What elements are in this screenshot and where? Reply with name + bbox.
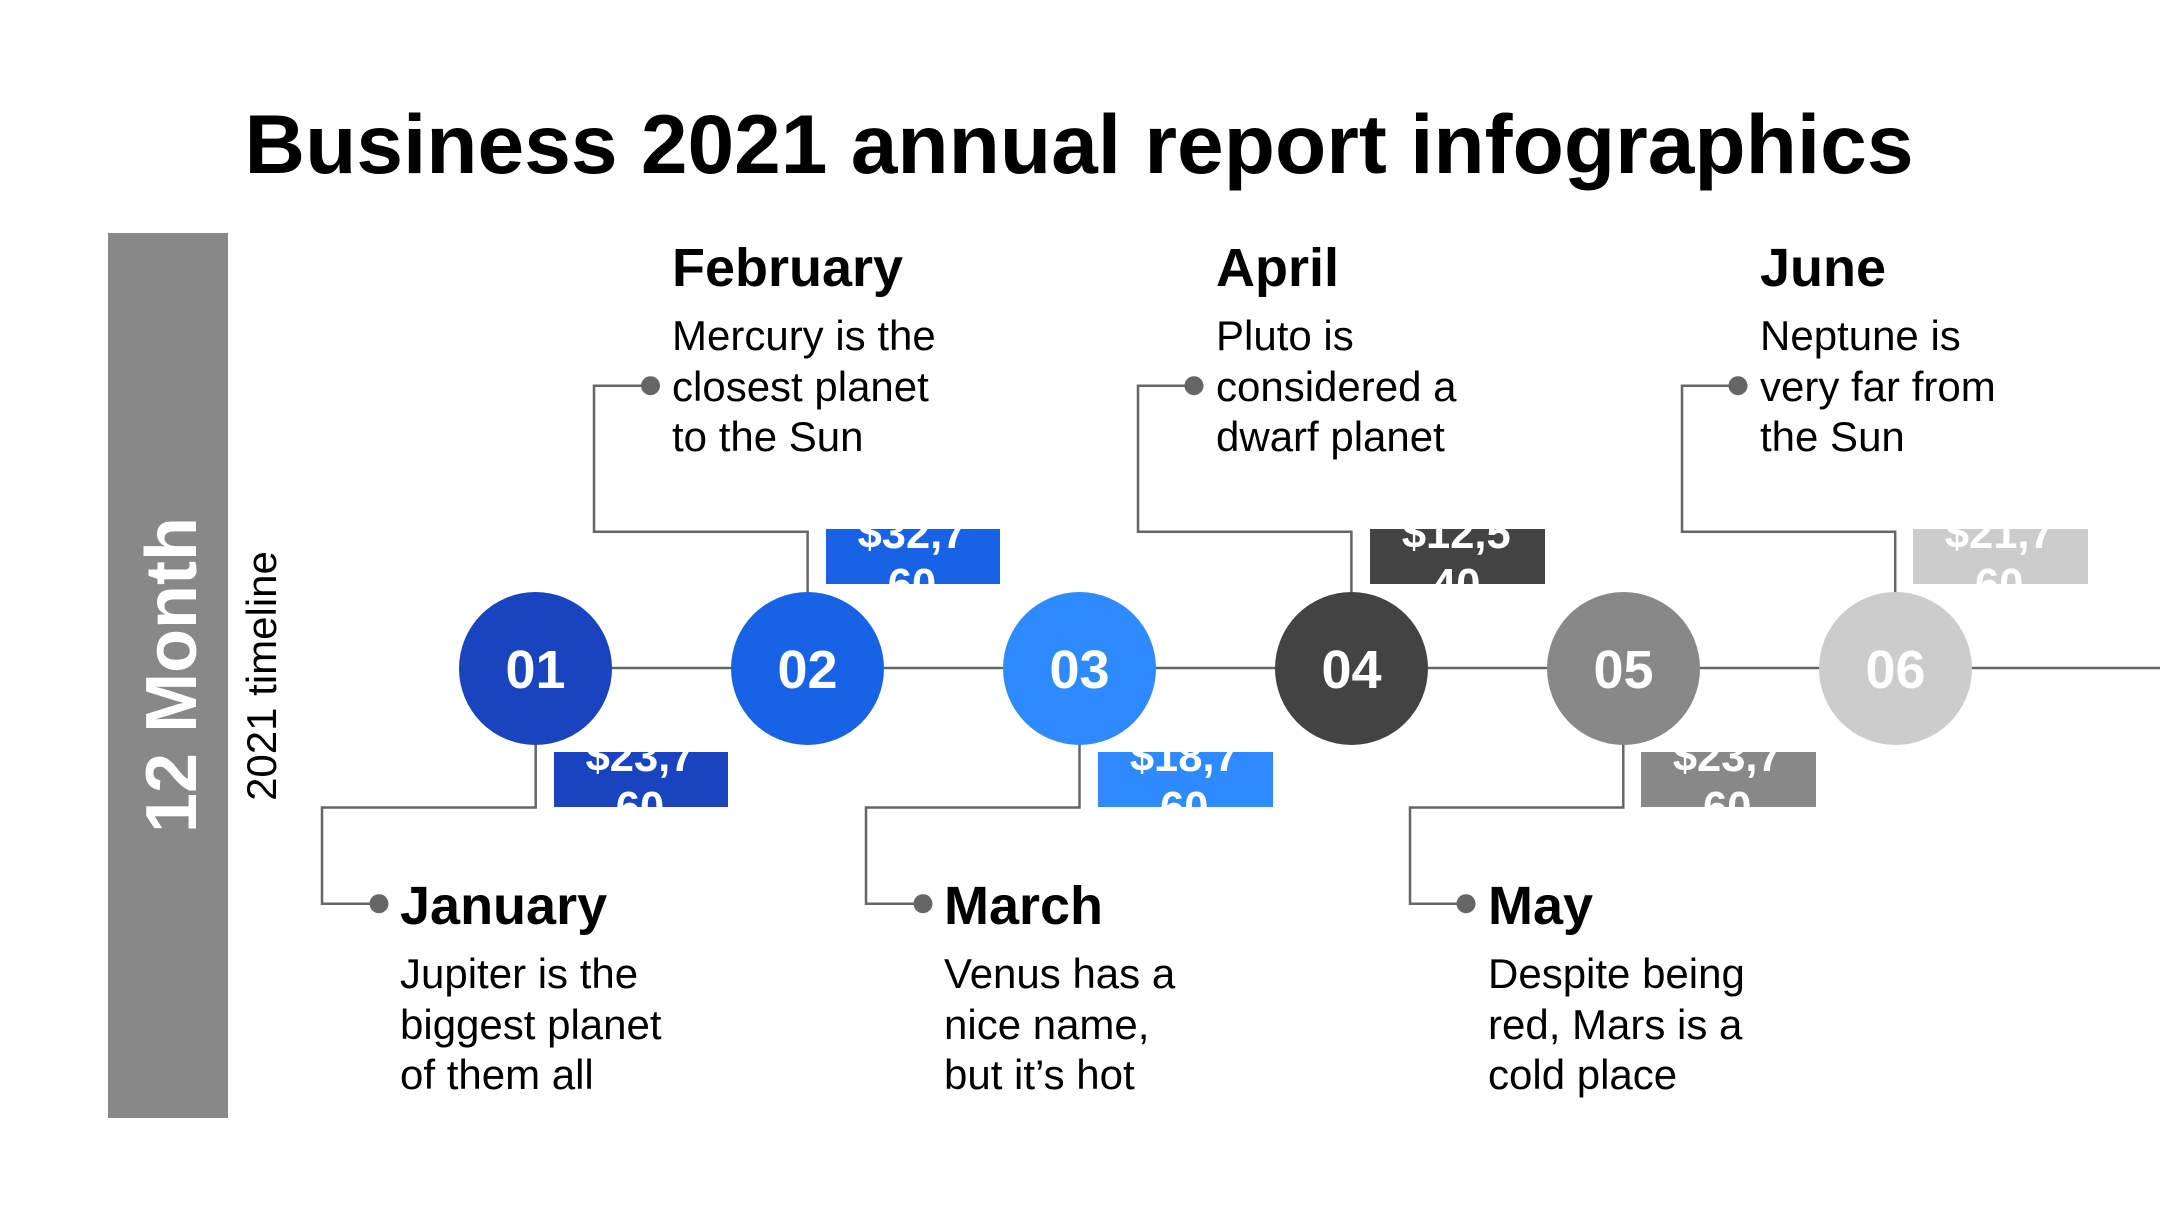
text block: February: Mercury is the <box>672 312 936 359</box>
side bar label: 12 Month <box>132 517 212 833</box>
value tag March <box>1098 752 1272 807</box>
text block: June: June <box>1760 238 1886 298</box>
text block: March: Venus has a <box>944 950 1175 997</box>
value tag April <box>1370 529 1544 584</box>
text block: February <box>672 238 936 460</box>
text block: May <box>1488 876 1745 1098</box>
node 04: 04 <box>1321 640 1382 700</box>
text block: April: dwarf planet <box>1216 413 1445 460</box>
text block: May: red, Mars is a <box>1488 1000 1742 1048</box>
text block: March: March <box>944 876 1103 936</box>
text block: January: of them all <box>400 1051 594 1098</box>
title: Business 2021 annual report infographics <box>245 96 1913 190</box>
text block: June <box>1760 238 1996 460</box>
value tag February <box>826 529 1000 584</box>
value tag June <box>1913 529 2088 584</box>
node 03 <box>1003 592 1156 745</box>
side subtitle: 2021 timeline: 2021 timeline <box>238 551 285 801</box>
text block: February: to the Sun <box>672 413 863 460</box>
text block: May: Despite being <box>1488 950 1745 997</box>
side bar: 12 Month <box>108 233 228 1118</box>
node 01: 01 <box>505 640 566 700</box>
text block: April: April <box>1216 238 1339 298</box>
text block: June: very far from <box>1760 362 1996 410</box>
value tag January <box>554 752 728 807</box>
node 03: 03 <box>1049 640 1110 700</box>
text block: May: cold place <box>1488 1051 1677 1098</box>
text block: January: January <box>400 876 607 936</box>
text block: February: February <box>672 238 903 298</box>
node 05: 05 <box>1593 640 1654 700</box>
text block: April: considered a <box>1216 362 1456 410</box>
text block: March <box>944 876 1176 1098</box>
text block: April: Pluto is <box>1216 312 1354 359</box>
node 02: 02 <box>777 640 838 700</box>
node 05 <box>1547 592 1700 745</box>
node 06: 06 <box>1865 640 1926 700</box>
node 04 <box>1275 592 1428 745</box>
text block: March: nice name, <box>944 1000 1149 1048</box>
text block: June: Neptune is <box>1760 312 1961 359</box>
node 01 <box>459 592 612 745</box>
text block: February: closest planet <box>672 362 929 410</box>
text block: April <box>1216 238 1456 460</box>
node 06 <box>1819 592 1972 745</box>
text block: January: Jupiter is the <box>400 950 638 997</box>
text block: January: biggest planet <box>400 1000 662 1048</box>
text block: June: the Sun <box>1760 413 1905 460</box>
text block: March: but it’s hot <box>944 1051 1135 1098</box>
text block: January <box>400 876 662 1098</box>
node 02 <box>731 592 884 745</box>
text block: May: May <box>1488 876 1593 936</box>
value tag May <box>1641 752 1816 807</box>
